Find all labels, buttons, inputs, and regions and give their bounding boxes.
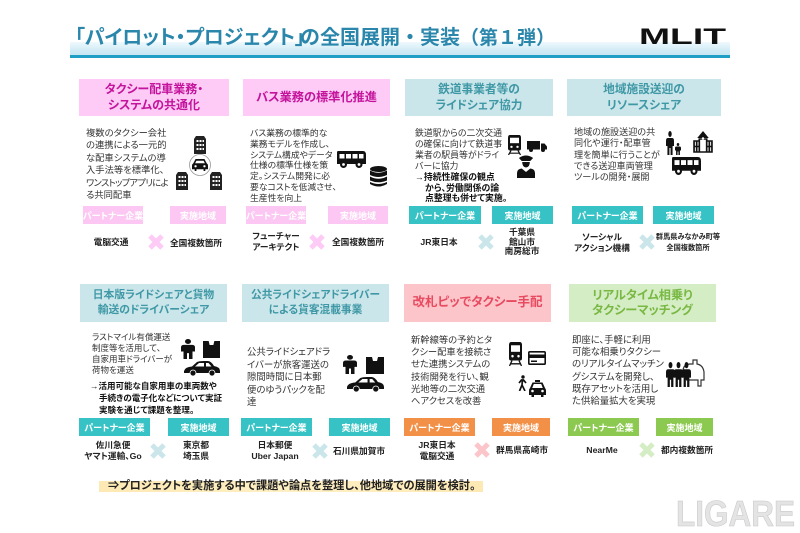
- panel: real-time shared taxi: [568, 284, 716, 458]
- partner tag: パートナー企業: [246, 422, 307, 432]
- heading: [80, 284, 227, 322]
- heading: [567, 79, 721, 116]
- panel: bus standardization: [243, 79, 390, 252]
- text block: 自家用車ドライバーが: [92, 354, 172, 364]
- region tag: [653, 206, 714, 224]
- panel: facility transport sharing: [567, 79, 721, 252]
- partner tag: パートナー企業: [409, 422, 470, 432]
- region tag: 実施地域: [180, 210, 216, 220]
- text block: [250, 128, 337, 203]
- text block: bold note: [90, 381, 222, 415]
- text block: bold note: 実験を通じて課題を整理。: [99, 405, 194, 415]
- cross mark: [148, 234, 164, 250]
- partner name: 電脳交通: [94, 237, 128, 247]
- text block: 公共ライドシェアドラ: [247, 346, 330, 357]
- region tag: 実施地域: [503, 422, 539, 432]
- text block: [574, 127, 660, 182]
- panel: ticket gate taxi: [404, 284, 551, 460]
- title: の全国展開・実装（第１弾）: [300, 27, 555, 49]
- partner name: [84, 440, 142, 460]
- icon: buildings and taxi: [176, 136, 222, 190]
- region tag: [170, 206, 226, 224]
- text block: bold note: 手続きの電子化などについて実証: [99, 393, 222, 403]
- text block: 新幹線等の予約とタ: [411, 335, 492, 345]
- cross mark: [639, 234, 655, 250]
- text block: 理を簡単に行うことが: [574, 150, 660, 160]
- cross mark: [309, 234, 325, 250]
- region name: [505, 227, 540, 256]
- partner tag: [572, 206, 643, 224]
- text block: バス業務の標準的な: [250, 128, 327, 138]
- partner tag: [409, 206, 481, 224]
- heading: 日本版ライドシェアと貨物: [93, 288, 214, 300]
- text block: た供給量拡大を実現: [572, 395, 655, 406]
- region tag: [492, 206, 553, 224]
- text block: 既存アセットを活用し: [572, 383, 658, 394]
- region tag: 実施地域: [340, 210, 376, 220]
- region tag: 実施地域: [665, 210, 702, 220]
- icon: parent, school and bus: [666, 131, 713, 175]
- text block: クシー配車を接続さ: [411, 347, 491, 357]
- text block: 鉄道駅からの二次交通: [415, 128, 502, 138]
- text block: [247, 346, 330, 407]
- heading: システムの共通化: [108, 98, 200, 112]
- text block: の連携による一元的: [86, 140, 167, 150]
- text block: から、労働関係の論: [425, 183, 499, 193]
- heading: バス業務の標準化推進: [256, 90, 377, 104]
- cross mark: [639, 442, 655, 458]
- text block: 隙間時間に日本郵: [247, 371, 322, 382]
- partner tag: [404, 418, 475, 436]
- text block: 複数のタクシー会社: [86, 128, 166, 138]
- heading: リソースシェア: [607, 98, 681, 112]
- heading: [569, 284, 716, 322]
- partner tag: [241, 418, 312, 436]
- partner name: [251, 440, 299, 460]
- partner tag: パートナー企業: [415, 210, 475, 220]
- region name: 東京都: [183, 440, 209, 450]
- region name: [183, 440, 209, 460]
- text block: ワンストップアプリによ: [86, 178, 168, 188]
- logo: MLIT: MLIT: [639, 24, 727, 49]
- icon: driver, parcel and car: [181, 339, 220, 376]
- partner name: ヤマト運輸、Go: [84, 450, 142, 460]
- text block: システム構成やデータ: [250, 150, 332, 160]
- text block: ツールの開発・展開: [574, 172, 650, 182]
- region name: 全国複数箇所: [666, 242, 710, 252]
- heading: リアルタイム相乗り: [592, 288, 693, 302]
- partner name: [418, 440, 456, 460]
- text block: できる送迎車両管理: [574, 161, 653, 171]
- text block: 達: [247, 396, 256, 407]
- title: [75, 26, 555, 49]
- text block: [572, 334, 664, 407]
- text block: [86, 128, 168, 200]
- text block: 便のゆうパックを配: [247, 384, 325, 394]
- panel: taxi dispatch: [79, 79, 229, 250]
- text block: な配車システムの導: [86, 153, 166, 163]
- text block: の確保に向けて鉄道事: [415, 139, 502, 149]
- partner name: アーキテクト: [252, 242, 300, 252]
- icon: bus and database: [337, 151, 387, 186]
- region name: 南房総市: [505, 246, 539, 256]
- text block: 制度等を活用して、: [92, 343, 161, 353]
- partner tag: パートナー企業: [577, 210, 638, 220]
- region tag: [168, 418, 229, 436]
- icon: train, card, walker and taxi: [509, 342, 546, 397]
- heading: [243, 79, 390, 116]
- region tag: [329, 418, 390, 436]
- partner tag: [246, 206, 306, 224]
- panel: ride share and freight: [79, 284, 229, 460]
- text block: 荷物を運送: [92, 365, 134, 375]
- region tag: 実施地域: [341, 422, 378, 432]
- text block: へアクセスを改善: [411, 396, 481, 406]
- text block: →持続性確保の観点: [415, 172, 495, 182]
- text block: 可能な相乗りタクシー: [572, 346, 661, 357]
- heading: 鉄道事業者等の: [438, 83, 520, 96]
- heading: による貨客混載事業: [269, 304, 362, 316]
- partner tag: パートナー企業: [84, 422, 145, 432]
- region name: 千葉県: [509, 227, 535, 237]
- text block: グシステムを開発し、: [572, 371, 655, 382]
- heading: 公共ライドシェアドライバー: [251, 288, 380, 300]
- heading: [79, 79, 229, 116]
- panel: railway ride share: [405, 79, 553, 256]
- text block: 仕様の標準仕様を策: [250, 160, 328, 170]
- partner tag: パートナー企業: [83, 210, 143, 220]
- region tag: [656, 418, 713, 436]
- cross mark: [150, 443, 166, 459]
- partner name: ソーシャル: [582, 232, 622, 242]
- heading: 地域施設送迎の: [603, 83, 685, 96]
- text block: 要なコストを低減させ、: [250, 182, 337, 192]
- title: 「パイロット・プロジェクト」: [75, 27, 305, 49]
- region name: 館山市: [509, 236, 535, 246]
- heading: [405, 79, 553, 116]
- region name: 都内複数箇所: [661, 445, 713, 455]
- partner tag: [83, 206, 143, 224]
- title band: [70, 42, 730, 58]
- cross mark: [474, 442, 490, 458]
- text block: バーに協力: [415, 161, 458, 171]
- text block: [411, 335, 492, 406]
- heading: タクシーマッチング: [592, 303, 693, 317]
- partner name: NearMe: [586, 445, 618, 455]
- partner name: 電脳交通: [420, 450, 454, 460]
- heading: [242, 284, 389, 322]
- icon: passengers and taxi: [666, 358, 706, 388]
- partner name: フューチャー: [252, 231, 300, 241]
- text block: 技術開発を行い、観: [411, 372, 489, 382]
- partner tag: パートナー企業: [246, 210, 306, 220]
- region name: 群馬県みなかみ町等: [656, 232, 720, 241]
- text block: 入手法等を標準化、: [86, 165, 164, 175]
- text block: 生産性を向上: [250, 193, 302, 203]
- text block: [415, 128, 507, 203]
- partner tag: [568, 418, 639, 436]
- text block: ラストマイル有償運送: [92, 332, 170, 342]
- text block: 同化や運行・配車管: [574, 138, 651, 148]
- text block: 地域の施設送迎の共: [574, 127, 655, 137]
- region name: 全国複数箇所: [332, 237, 384, 247]
- heading: [404, 284, 551, 322]
- conclusion callout: ⇒プロジェクトを実施する中で課題や論点を整理し、他地域での展開を検討。: [108, 480, 476, 492]
- region name: [656, 232, 720, 252]
- icon: driver, parcel and car: [343, 355, 384, 392]
- region tag: 実施地域: [504, 210, 540, 220]
- partner name: [252, 231, 300, 252]
- partner name: JR東日本: [420, 237, 458, 247]
- partner name: Uber Japan: [251, 450, 299, 460]
- partner name: [574, 232, 630, 252]
- partner name: 佐川急便: [96, 440, 130, 450]
- heading: 改札ピッでタクシー手配: [412, 295, 543, 309]
- text block: る共同配車: [86, 190, 132, 200]
- partner name: 日本郵便: [258, 440, 292, 450]
- text block: [92, 332, 172, 375]
- cross mark: [312, 443, 328, 459]
- region tag: 実施地域: [180, 422, 216, 432]
- text block: イバーが旅客運送の: [247, 358, 329, 370]
- icon: train, truck and officer: [508, 135, 547, 178]
- text block: 光地等の二次交通: [411, 384, 485, 394]
- heading: ライドシェア協力: [436, 98, 522, 112]
- text block: 点整理も併せて実施。: [425, 193, 507, 203]
- text block: bold note: →活用可能な自家用車の車両数や: [90, 381, 217, 391]
- region tag: 実施地域: [666, 422, 702, 432]
- text block: 業者の駅員等がドライ: [415, 150, 499, 160]
- partner tag: [79, 418, 150, 436]
- text block: のリアルタイムマッチン: [572, 358, 664, 369]
- partner name: JR東日本: [418, 440, 456, 450]
- partner name: アクション機構: [574, 242, 630, 252]
- text block: 即座に、手軽に利用: [572, 334, 651, 345]
- text block: 定。システム開発に必: [250, 171, 330, 181]
- cross mark: [478, 234, 494, 250]
- text block: 業務モデルを作成し、: [250, 139, 330, 149]
- panel: mixed passenger freight: [241, 284, 390, 460]
- region name: 石川県加賀市: [333, 446, 385, 456]
- region name: 群馬県高崎市: [496, 445, 548, 455]
- region name: 全国複数箇所: [170, 238, 222, 248]
- text block: せた連携システムの: [411, 359, 490, 369]
- heading: タクシー配車業務・: [105, 82, 203, 96]
- region name: 埼玉県: [183, 450, 209, 460]
- region tag: [492, 418, 550, 436]
- region tag: [328, 206, 388, 224]
- partner tag: パートナー企業: [573, 422, 634, 432]
- heading: 輸送のドライバーシェア: [98, 304, 209, 316]
